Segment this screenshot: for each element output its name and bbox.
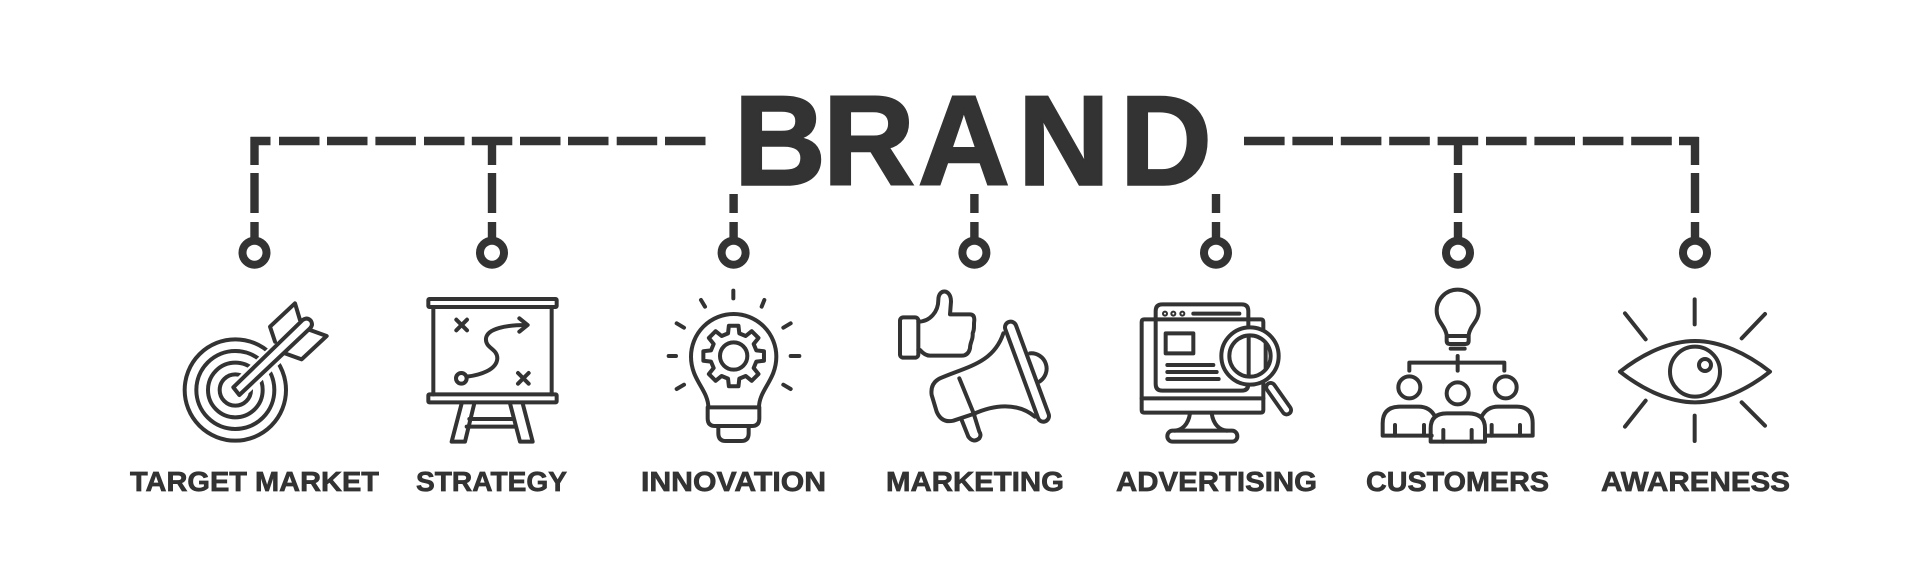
label: awareness: AWARENESS: [1601, 466, 1790, 497]
node circles: [242, 241, 1707, 265]
label: target market: TARGET MARKET: [130, 466, 379, 497]
icon: innovation light bulb with gear: [669, 291, 799, 441]
icon: awareness eye: [1620, 299, 1770, 441]
label: innovation: INNOVATION: [641, 466, 826, 497]
label: customers: CUSTOMERS: [1366, 466, 1549, 497]
label: advertising: ADVERTISING: [1116, 466, 1317, 497]
dashed connector: right branch: [1244, 137, 1698, 242]
title: BRAND: [734, 70, 1212, 212]
icon: target with arrow: [185, 303, 327, 441]
icon: marketing thumbs up and megaphone: [900, 291, 1047, 440]
dashed connectors: centre stubs: [734, 194, 1216, 242]
label: marketing: MARKETING: [886, 466, 1064, 497]
icon: strategy board: [428, 299, 557, 442]
dashed connector: left branch: [250, 137, 706, 242]
icon: customers with idea bulb: [1383, 290, 1533, 442]
label: strategy: STRATEGY: [416, 466, 567, 497]
icon: advertising monitor with magnifier: [1142, 304, 1287, 442]
